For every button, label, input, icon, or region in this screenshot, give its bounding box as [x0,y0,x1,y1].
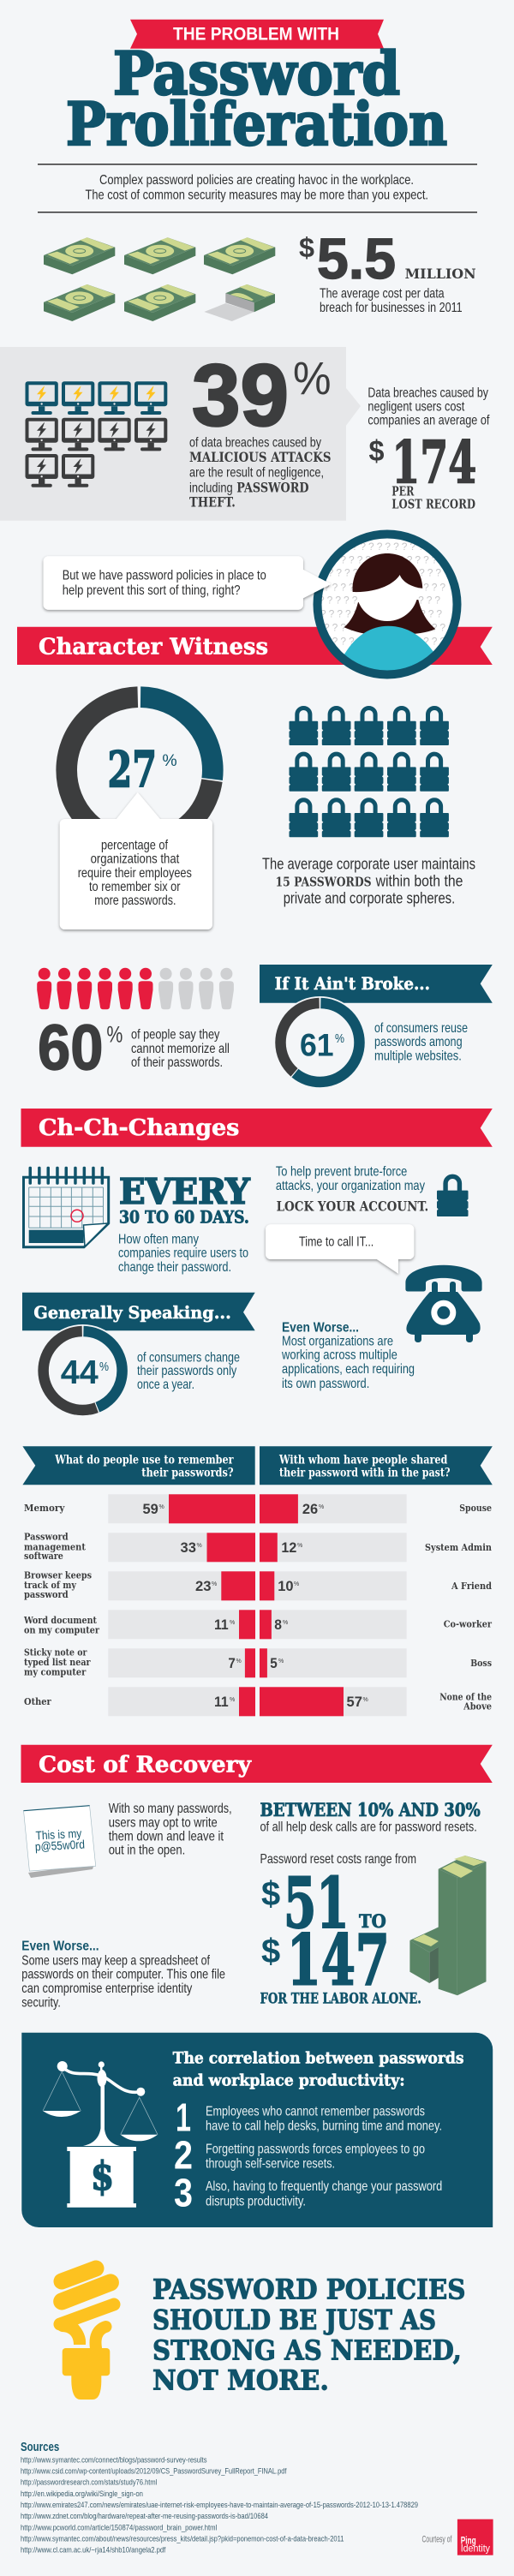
text: even worse, spreadsheet: Some users may keep a spreadsheet of [21,1953,210,1968]
number: 39 percent: % [293,353,331,404]
stat: every 30 to 60 days [118,1171,250,1275]
stat: 174 per lost record: 174 [391,428,476,497]
sources list: http://www.emirates247.com/news/emirates/uae-internet-risk-employees-have-to-maintain-average-of-15-passwords-2012-10-13-1.478829 [21,2501,418,2510]
speech bubble: time to call IT: Time to call IT... [299,1234,374,1249]
section ribbon: Cost of Recovery: Cost of Recovery [39,1752,253,1778]
section ribbon: Ch-Ch-Changes [21,1109,493,1147]
sources list: http://www.symantec.com/about/news/resources/press_kits/detail.jsp?pkid=ponemon-cost-of-a-data-breach-2011 [21,2534,344,2543]
question mark pattern: ??????????????? [319,595,443,607]
text: lock your account [276,1165,428,1214]
stat: 174 per lost record: LOST RECORD [391,497,475,511]
bar values: % [236,1659,242,1665]
sources list [21,2441,418,2555]
stat: 60 percent: of their passwords. [131,1055,223,1070]
right category labels: Spouse [459,1503,492,1514]
bar values: % [159,1504,164,1510]
stat: 51 to 147 dollars: TO [359,1910,386,1932]
panel: productivity correlation [21,2033,493,2227]
text: malicious attacks [189,436,331,511]
sources list: http://www.pcworld.com/article/150874/password_brain_power.html [21,2523,217,2532]
text: write them down: With so many passwords, [109,1802,232,1816]
numbered list [174,2095,442,2215]
text: consumers reuse passwords: passwords among [374,1035,463,1049]
bar values: 11 [214,1694,229,1710]
left category labels [23,1503,100,1707]
closing statement: STRONG AS NEEDED, [152,2334,462,2366]
stat: 5.5 million: 5.5 [317,227,396,291]
icon: money towers [409,1856,487,1995]
icon: padlock [437,1176,468,1216]
chart header: shared passwords [260,1446,493,1485]
right category labels: System Admin [425,1542,492,1553]
text: malicious attacks: PASSWORD [236,479,308,495]
sticky note: This is my [35,1826,82,1842]
text: even worse, multiple applications: Most organizations are [282,1335,393,1349]
text: even worse, multiple applications: working across multiple [281,1348,397,1363]
text: consumers change passwords [137,1350,240,1392]
numbered list: disrupts productivity. [206,2194,306,2208]
stat: 51 to 147 dollars: 51 [284,1863,350,1945]
sticky note [24,1805,96,1878]
question mark pattern [319,541,448,648]
sources list: http://www.cl.cam.ac.uk/~rja14/shb10/angela2.pdf [21,2545,166,2555]
stat: 5.5 million: breach for businesses in 2011 [320,301,463,315]
bar values: % [230,1697,235,1703]
bar values: % [319,1504,324,1510]
numbered list: through self-service resets. [206,2157,335,2172]
bar values: % [197,1543,202,1549]
title: Proliferation: Proliferation [66,90,447,159]
chart header: remember passwords [22,1446,255,1485]
text: 15 passwords: within both the [375,872,463,889]
portrait: woman in ring [317,535,457,685]
text: lock your account: attacks, your organization may [276,1179,425,1193]
text: malicious attacks: of data breaches caused by [189,436,321,451]
left category labels: my computer [24,1666,87,1677]
text: consumers reuse passwords: of consumers reuse [374,1021,468,1036]
pictogram: people 60 percent [37,968,234,1009]
closing statement: NOT MORE. [152,2364,329,2396]
stat: every 30 to 60 days: companies require users to [118,1246,248,1261]
text: malicious attacks: including [189,481,233,495]
bar values: % [363,1697,368,1703]
stat: between 10 and 30 percent [260,1799,481,1867]
left category labels: typed list near [24,1657,91,1668]
bar values: % [278,1659,284,1665]
question mark pattern: ??????????????? [324,622,448,634]
callout: percentage of organizations [60,792,212,929]
text: 15 passwords: private and corporate spheres. [284,889,455,906]
bar values: % [283,1620,288,1626]
left category labels: Other [24,1696,51,1707]
icon: fifteen padlocks [290,708,449,837]
stat: between 10 and 30 percent: Password reset costs range from [260,1852,416,1867]
left category labels: management [24,1541,86,1552]
numbered list: 2 [174,2133,193,2178]
stat: every 30 to 60 days: change their password. [118,1260,231,1275]
stat: 60 percent: 60 [38,1011,103,1083]
right category labels: Co-worker [444,1618,493,1629]
title banner [130,20,384,49]
question mark pattern: ??????????????? [324,581,448,593]
donut chart: 44 percent: % [99,1360,109,1374]
closing statement: SHOULD BE JUST AS [152,2304,436,2336]
bar values: % [212,1581,217,1587]
panel heading [173,2049,463,2089]
donut chart: 27 percent: 27 [108,740,157,798]
speech bubble: password policies: But we have password policies in place to [63,569,266,583]
logo: courtesy of Ping Identity: Courtesy of [421,2535,452,2545]
bar values: 11 [214,1617,229,1633]
sources list: Sources [21,2441,59,2454]
right category labels: A Friend [451,1581,492,1592]
icon: balance scale: $ [91,2153,114,2199]
text: even worse, spreadsheet: security. [21,1995,61,2010]
title block [66,20,447,159]
numbered list: Forgetting passwords forces employees to go [206,2142,425,2156]
text: malicious attacks: THEFT. [189,494,236,511]
sources list: http://www.csid.com/wp-content/uploads/2012/09/CS_PasswordSurvey_FullReport_FINAL.pdf [21,2467,287,2477]
stat: 174 per lost record: PER [391,484,415,499]
bar values: % [230,1620,235,1626]
icon: telephone [405,1265,482,1342]
icon: balance scale [43,2061,158,2208]
text: even worse, spreadsheet: can compromise enterprise identity [21,1981,192,1996]
donut chart: 61 percent [274,996,367,1089]
question mark pattern: ??????????????? [324,553,448,565]
bar values: 33 [180,1539,196,1556]
donut chart: 44 percent [37,1324,129,1417]
bar values: 7 [228,1655,236,1671]
text: lock your account: LOCK YOUR ACCOUNT. [277,1198,428,1214]
text: 15 passwords [262,855,475,906]
stat: 174 per lost record: $ [368,435,385,468]
bar values: 12 [281,1539,296,1556]
right category labels [425,1503,493,1712]
section ribbon: Cost of Recovery [21,1745,493,1783]
chart header: shared passwords: With whom have people shared [278,1453,448,1467]
callout: percentage of organizations: to remember six or [89,880,181,894]
text: even worse, spreadsheet: Even Worse... [21,1939,99,1954]
text: even worse, multiple applications: applications, each requiring [282,1362,415,1377]
intro text: Complex password policies are creating havoc in the workplace. [99,173,414,188]
numbered list: 3 [174,2171,193,2215]
section ribbon: Ch-Ch-Changes: Ch-Ch-Changes [39,1115,239,1141]
bar values: 5 [270,1655,278,1671]
stat: 5.5 million: MILLION [405,266,476,282]
left category labels: Sticky note or [24,1647,87,1659]
stat: 60 percent: of people say they [131,1028,219,1043]
stat: 51 to 147 dollars: $ [261,1933,280,1970]
text: consumers reuse passwords [374,1021,468,1063]
icon: money stacks [44,237,275,321]
stat: between 10 and 30 percent: BETWEEN 10% AND 30% [260,1799,481,1820]
bar values: 23 [195,1578,211,1594]
bar values: 57 [346,1694,362,1710]
sources list: http://www.symantec.com/connect/blogs/password-survey-results [21,2456,207,2465]
intro text [38,164,477,212]
numbered list: Employees who cannot remember passwords [206,2104,425,2119]
stat: 51 to 147 dollars: FOR THE LABOR ALONE. [260,1990,421,2007]
panel: 39 percent [0,347,361,521]
closing statement: PASSWORD POLICIES [152,2273,465,2305]
text: write them down: out in the open. [109,1844,185,1858]
right category labels: Above [463,1701,492,1712]
text: consumers change passwords: of consumers change [137,1350,240,1365]
text: write them down [109,1802,232,1858]
donut chart: 27 percent: % [162,752,177,770]
text: even worse, multiple applications: its own password. [282,1377,369,1391]
number: 39 percent [192,347,331,445]
sources list: http://passwordresearch.com/stats/study76.html [21,2478,157,2488]
text: even worse, spreadsheet: passwords on their computer. This one file [21,1968,225,1982]
panel heading: and workplace productivity: [173,2071,405,2089]
text: consumers change passwords: once a year. [137,1378,194,1392]
callout: percentage of organizations: organizations that [91,852,180,867]
left category labels: Password [24,1532,69,1543]
chart header: remember passwords: What do people use to remember [54,1453,234,1467]
section ribbon: Character Witness [17,627,493,665]
right category labels: Boss [470,1658,492,1669]
left category labels: on my computer [24,1625,100,1636]
donut chart: 61 percent: 61 [300,1028,334,1063]
title banner: THE PROBLEM WITH [173,25,339,45]
numbered list: 1 [176,2095,191,2140]
stat: 174 per lost record [368,386,490,511]
sources list: http://www.zdnet.com/blog/hardware/repeat-after-me-reusing-passwords-is-bad/10684 [21,2512,268,2521]
stat: 5.5 million: $ [299,232,314,263]
stat: 60 percent: % [106,1022,123,1048]
icon: light bulb [57,2268,114,2400]
question mark pattern: ??????????????? [324,636,448,648]
speech bubble: password policies: help prevent this sort of thing, right? [63,583,241,598]
left category labels: password [24,1589,69,1600]
callout: percentage of organizations: require their employees [78,866,192,881]
closing statement [152,2273,465,2396]
stat: 51 to 147 dollars [260,1863,421,2007]
stat: every 30 to 60 days: EVERY [119,1171,250,1212]
ribbon: If It Ain't Broke: If It Ain't Broke... [275,973,430,994]
bar values: 59 [142,1501,158,1517]
icon: calendar [24,1167,109,1247]
callout: percentage of organizations: more passwords. [94,894,176,908]
icon: monitors [26,381,167,487]
bar values: 8 [274,1617,282,1633]
chart header: shared passwords: their password with in the past? [279,1466,451,1479]
title: Password: Password [113,39,400,109]
number: 39 percent: 39 [192,347,289,445]
bar values: % [297,1543,302,1549]
left category labels: software [24,1551,63,1562]
logo: courtesy of Ping Identity: Identity [461,2542,490,2554]
bar chart: diverging bars [23,1494,493,1716]
text: malicious attacks: are the result of negligence, [189,466,324,481]
question mark pattern: ??????????????? [320,567,444,579]
donut chart: 61 percent: % [335,1032,344,1046]
bar values: 26 [302,1501,318,1517]
bar values: % [294,1581,299,1587]
intro text: The cost of common security measures may be more than you expect. [86,188,428,202]
text: even worse, multiple applications: Even Worse... [282,1320,359,1335]
stat: 51 to 147 dollars: $ [261,1875,280,1913]
ribbon: If It Ain't Broke [260,965,493,1003]
stat: every 30 to 60 days: 30 TO 60 DAYS. [119,1206,249,1227]
donut chart: 27 percent [67,697,212,843]
chart header: remember passwords: their passwords? [141,1466,233,1479]
text: 15 passwords: 15 PASSWORDS [276,874,372,889]
question mark pattern: ??????????????? [320,608,445,620]
stat: 5.5 million [299,227,476,315]
ribbon: Generally Speaking [22,1293,255,1330]
section ribbon: Character Witness: Character Witness [39,634,268,660]
stat: 174 per lost record: negligent users cost [368,399,465,414]
panel heading: The correlation between passwords [173,2049,463,2067]
text: even worse, multiple applications [281,1320,415,1391]
bar values [142,1501,368,1710]
text: consumers reuse passwords: multiple websites. [374,1049,462,1063]
text: write them down: users may opt to write [109,1815,218,1830]
speech bubble: time to call IT [266,1224,414,1274]
sources list: http://en.wikipedia.org/wiki/Single_sign-on [21,2489,143,2499]
stat: 60 percent [38,1011,230,1083]
stat: every 30 to 60 days: How often many [118,1233,199,1247]
text: write them down: them down and leave it [109,1829,224,1844]
logo: courtesy of Ping Identity [421,2519,493,2555]
donut chart: 44 percent: 44 [61,1354,99,1391]
left category labels: Memory [24,1503,65,1514]
sticky note: p@55w0rd [34,1838,85,1854]
right category labels: None of the [439,1691,492,1702]
left category labels: track of my [24,1580,76,1591]
text: consumers change passwords: their passwords only [137,1364,236,1378]
ribbon: Generally Speaking: Generally Speaking... [33,1302,231,1323]
text: lock your account: To help prevent brute-force [276,1165,407,1180]
callout: percentage of organizations: percentage of [101,839,168,853]
numbered list: Also, having to frequently change your password [206,2179,442,2194]
stat: 5.5 million: The average cost per data [320,287,445,302]
text: even worse, spreadsheet [21,1939,225,2010]
logo: courtesy of Ping Identity: Ping [461,2534,476,2546]
numbered list: have to call help desks, burning time and money. [206,2119,442,2134]
stat: 51 to 147 dollars: 147 [287,1921,390,2002]
left category labels: Word document [23,1615,97,1626]
text: malicious attacks: MALICIOUS ATTACKS [189,449,331,465]
left category labels: Browser keeps [24,1569,92,1581]
bar values: 10 [278,1578,293,1594]
stat: 60 percent: cannot memorize all [131,1042,230,1056]
speech bubble: password policies [43,556,331,610]
question mark pattern: ??????????????? [319,541,443,553]
